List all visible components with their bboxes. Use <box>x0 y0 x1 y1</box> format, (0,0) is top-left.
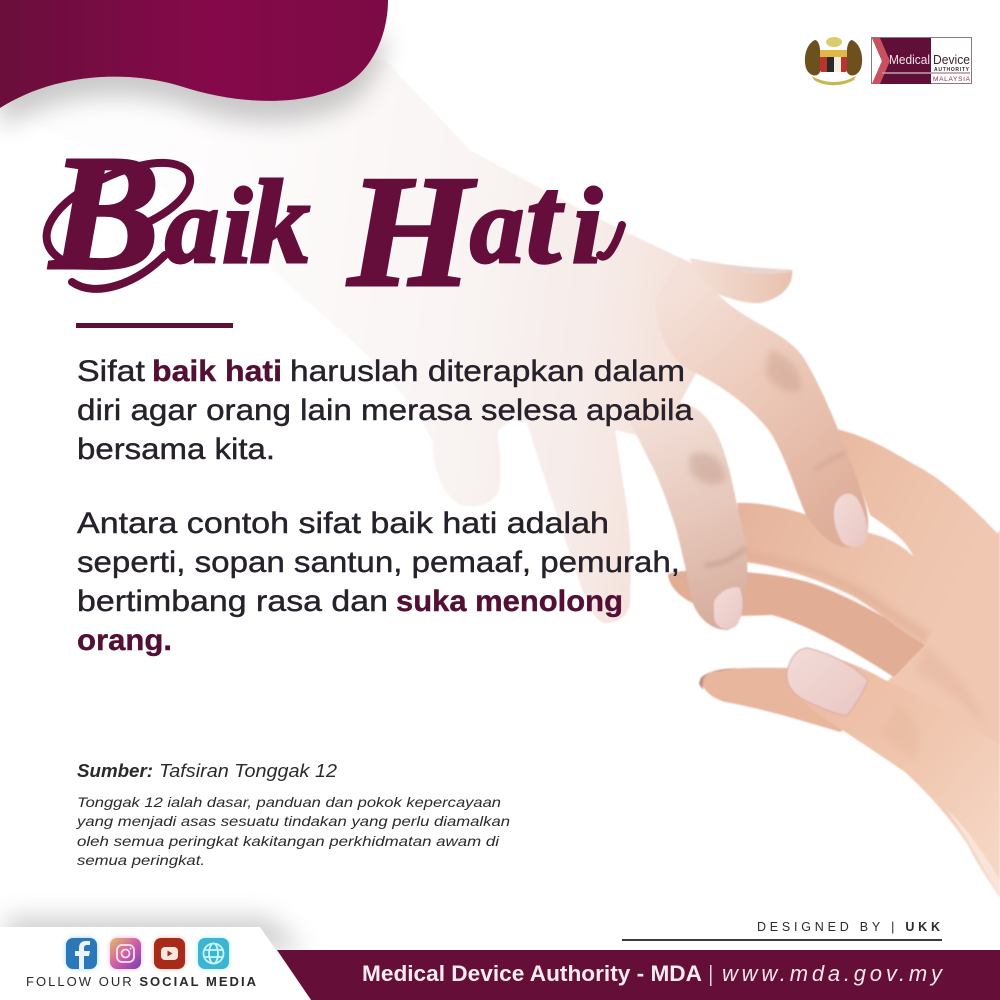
title: t <box>526 152 564 290</box>
text block: paragraph one: bersama kita. <box>77 433 275 466</box>
source description <box>76 794 510 868</box>
text block: paragraph two: seperti, sopan santun, pemaaf, pemurah, <box>77 546 680 579</box>
title flourish <box>47 163 622 289</box>
logo: Medical Device Authority: Device <box>933 53 970 67</box>
icon: instagram <box>110 938 141 969</box>
logo: Medical Device Authority: Medical <box>889 53 930 67</box>
illustration: faded upper hand <box>0 60 730 623</box>
emphasis: suka menolong orang <box>77 585 623 657</box>
footer organisation name: Medical Device Authority - MDA <box>362 961 702 986</box>
logo: Medical Device Authority: MALAYSIA <box>933 76 971 83</box>
follow label: FOLLOW OUR SOCIAL MEDIA <box>26 974 257 989</box>
logo: Medical Device Authority: AUTHORITY <box>934 67 970 73</box>
title: i <box>572 167 602 286</box>
source heading: Sumber: <box>77 761 153 781</box>
title <box>47 121 622 320</box>
long finger with nail <box>700 668 860 732</box>
upper finger of lower hand <box>832 428 1000 640</box>
footer band <box>277 950 1000 1000</box>
palm crease shading <box>915 645 985 725</box>
finger B nail <box>834 494 867 547</box>
text block: paragraph two: bertimbang rasa dan <box>77 585 388 618</box>
source description: yang menjadi asas sesuatu tindakan yang perlu diamalkan <box>76 813 510 829</box>
icon: youtube <box>154 938 185 969</box>
emphasis: suka menolong orang: orang. <box>77 624 172 657</box>
text block: paragraph one <box>77 355 693 466</box>
icon: website globe <box>198 938 229 969</box>
social panel <box>0 927 311 1000</box>
source description: oleh semua peringkat kakitangan perkhidmatan awam di <box>77 833 500 849</box>
title: a <box>470 167 524 286</box>
finger C <box>625 400 747 630</box>
designed by credit: DESIGNED BY | UKK <box>757 920 940 934</box>
finger A <box>690 258 792 303</box>
title: k <box>250 155 310 288</box>
text block: paragraph two <box>77 507 680 657</box>
divider under title <box>76 323 233 328</box>
finger B knuckle <box>765 350 801 393</box>
footer website: www.mda.gov.my <box>722 961 944 986</box>
finger C nail <box>714 587 743 629</box>
thumb <box>790 650 1000 898</box>
emphasis: suka menolong orang: suka menolong <box>396 585 623 618</box>
thumb knuckle shading <box>880 700 919 760</box>
icon: facebook <box>66 938 97 969</box>
finger B joint <box>815 452 845 470</box>
text block: paragraph two: Antara contoh sifat baik hati adalah <box>77 507 609 540</box>
top wave shape <box>0 0 388 108</box>
emphasis: baik hati: baik hati <box>152 355 282 388</box>
title: a <box>165 167 219 286</box>
illustration: lower hand <box>625 258 1000 898</box>
middle finger <box>737 503 960 645</box>
text block: paragraph one: haruslah diterapkan dalam <box>290 355 685 388</box>
thumb nail <box>787 648 868 716</box>
text block: paragraph one: diri agar orang lain merasa selesa apabila <box>77 394 693 427</box>
title: B <box>48 121 160 304</box>
finger C joint <box>705 548 745 565</box>
footer shadow <box>6 917 306 950</box>
title: i <box>222 167 252 286</box>
logo: coat of arms <box>805 37 862 85</box>
text block: paragraph one: Sifat <box>77 355 146 388</box>
finger C knuckle <box>690 453 726 485</box>
source heading <box>77 761 337 781</box>
lower finger <box>668 570 925 678</box>
source description: semua peringkat. <box>77 852 205 868</box>
finger B <box>655 258 868 547</box>
palm <box>888 530 1000 800</box>
source description: Tonggak 12 ialah dasar, panduan dan pokok kepercayaan <box>77 794 501 810</box>
shadow under top wave <box>0 16 388 128</box>
source heading: Tafsiran Tonggak 12 <box>159 761 337 781</box>
logo: Medical Device Authority <box>872 38 972 84</box>
title: H <box>346 142 477 320</box>
